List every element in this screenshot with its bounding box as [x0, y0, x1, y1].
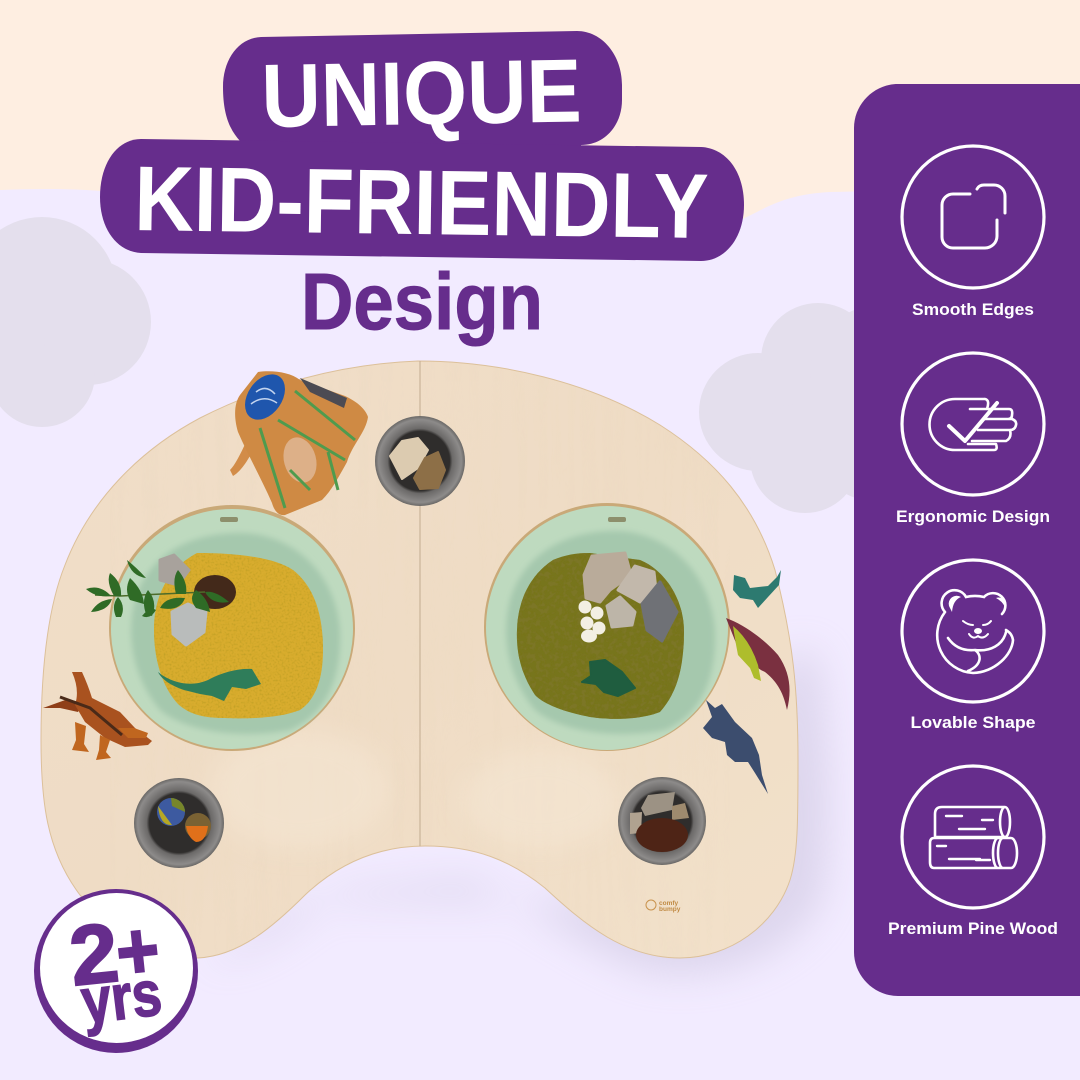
age badge: yrs: [77, 956, 165, 1038]
cup bottom right with stones: [618, 777, 706, 865]
slot: [220, 517, 238, 522]
triceratops toy: [703, 700, 768, 794]
age badge: 2: [65, 905, 123, 1003]
heading: unique pill: UNIQUE: [261, 41, 582, 147]
age badge: [34, 889, 198, 1053]
cup bottom left with balls: [134, 778, 224, 868]
cup top with stones: [375, 416, 465, 506]
feature: lovable shape: Lovable Shape: [910, 713, 1036, 732]
logo on table: bumpy: [659, 906, 681, 913]
rocks and eggs: [578, 553, 677, 642]
small teal dinosaur: [733, 570, 781, 608]
cloud left: [0, 217, 151, 427]
plant and rocks: [86, 555, 236, 645]
feature: premium pine wood: [888, 766, 1058, 938]
logo on table: comfy: [659, 900, 679, 907]
stegosaurus toy: [726, 618, 790, 710]
logo on table: [646, 900, 681, 913]
heading: design: Design: [301, 257, 543, 346]
volcano toy: [230, 367, 368, 515]
feature: premium pine wood: Premium Pine Wood: [888, 919, 1058, 938]
wooden table: [40, 360, 798, 958]
feature: ergonomic design: [896, 353, 1050, 526]
right bowl with mung beans: [484, 503, 730, 751]
yellow sand: [154, 553, 323, 718]
slot: [608, 517, 626, 522]
feature: smooth edges: Smooth Edges: [912, 300, 1034, 319]
green dinosaur in sand: [158, 669, 261, 701]
left bowl with yellow sand: [86, 505, 355, 751]
features panel: [854, 84, 1080, 996]
mung beans: [517, 553, 684, 719]
cloud right: [699, 303, 950, 513]
feature: lovable shape: [902, 560, 1044, 732]
heading: kid-friendly pill: KID-FRIENDLY: [134, 148, 709, 258]
feature: smooth edges: [902, 146, 1044, 319]
lizard toy: [43, 672, 152, 760]
age badge: +: [112, 904, 164, 997]
table shadow: [205, 650, 828, 973]
green figure in beans: [582, 660, 635, 696]
feature: ergonomic design: Ergonomic Design: [896, 507, 1050, 526]
